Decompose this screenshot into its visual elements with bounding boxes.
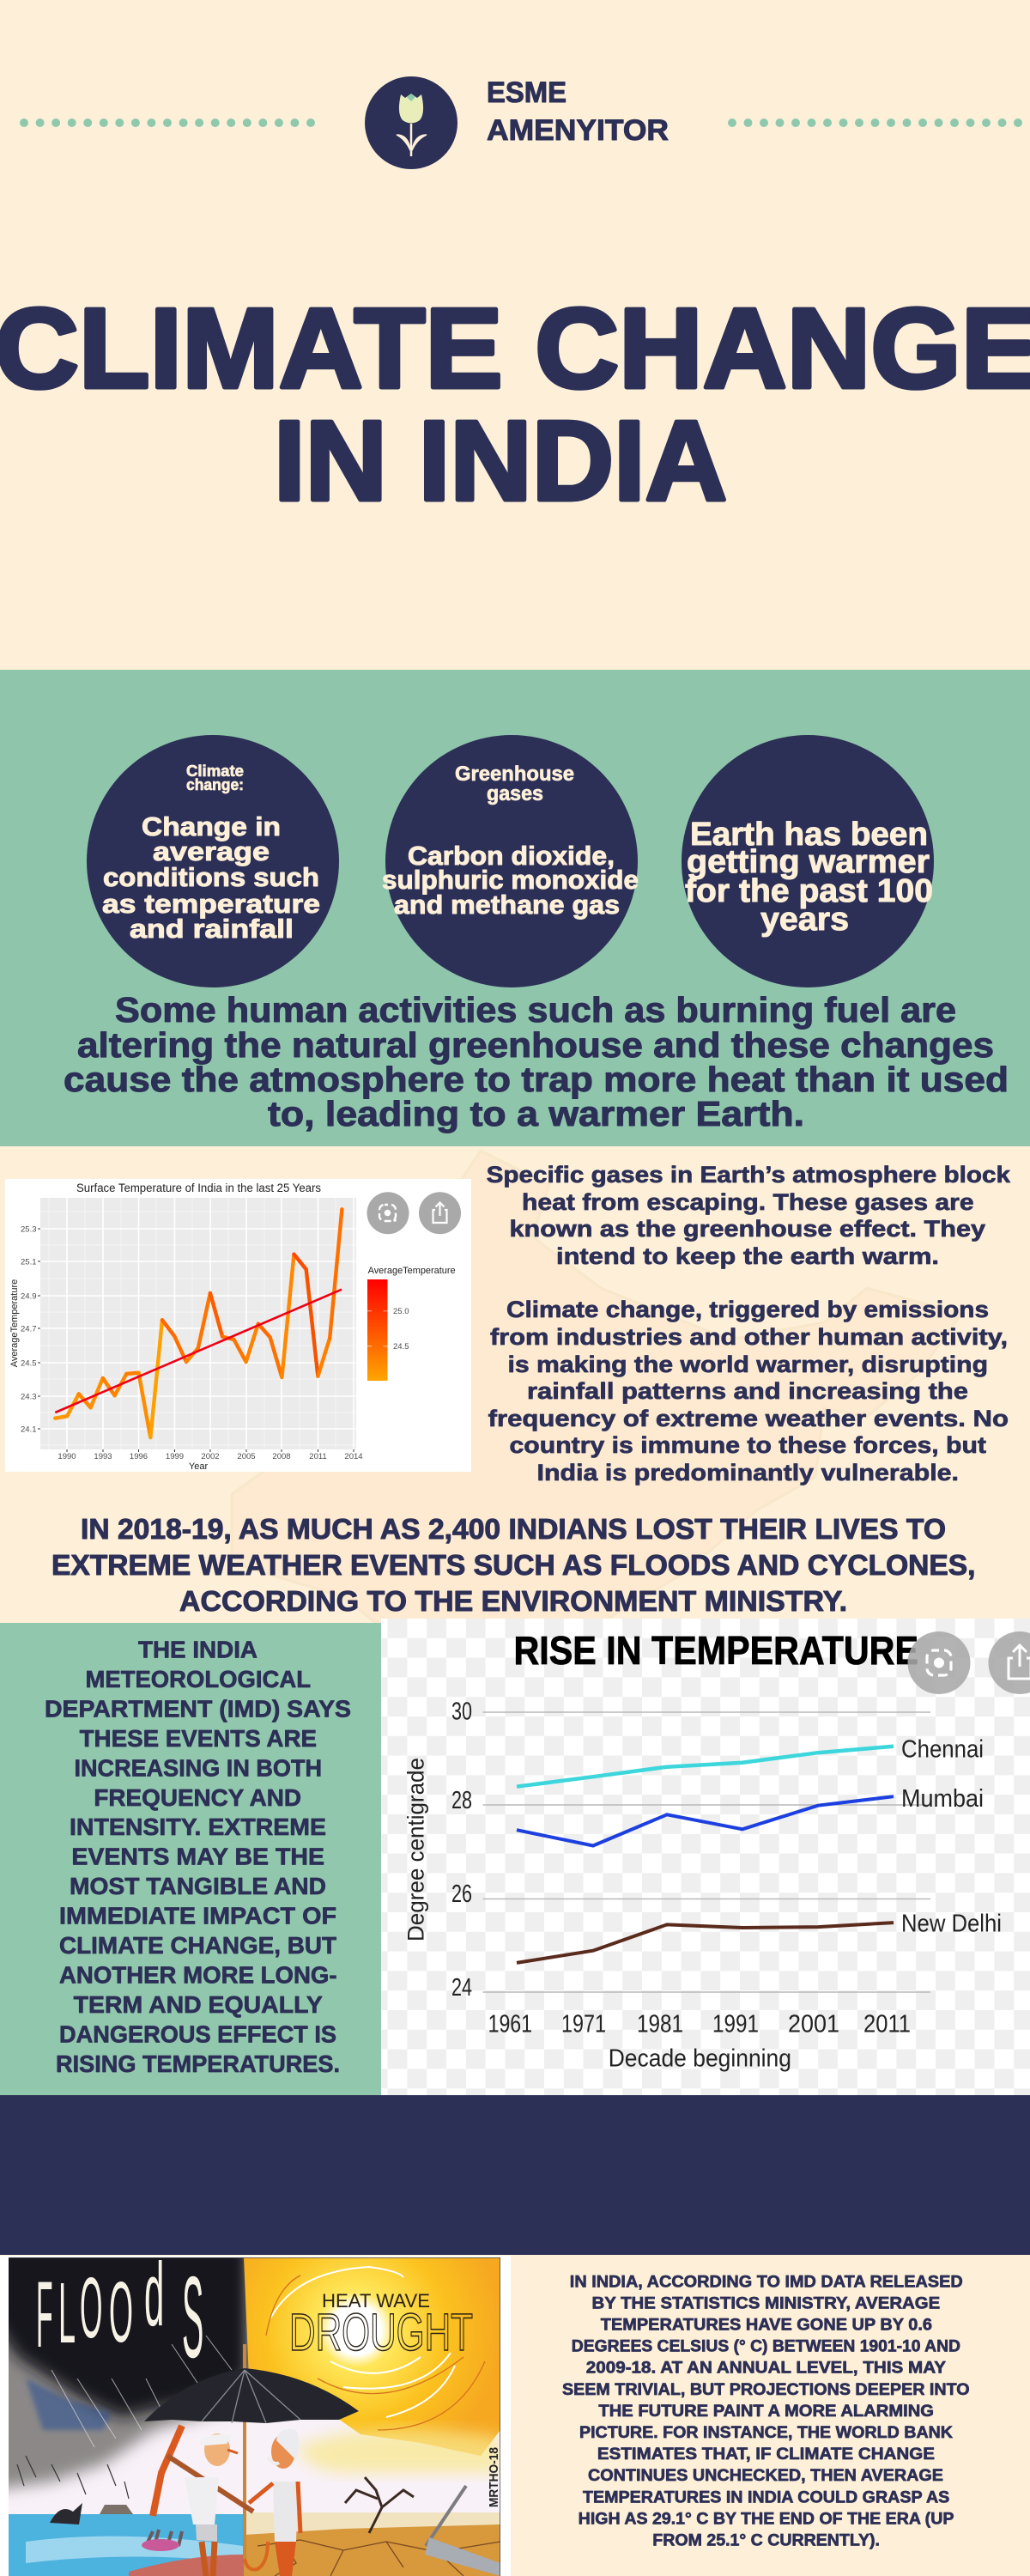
- dotted rule: left: [20, 118, 315, 127]
- heading: extreme weather deaths: IN 2018-19, AS MUCH AS 2,400 INDIANS LOST THEIR LIVES TO: [81, 1513, 946, 1545]
- text: human activities paragraph: cause the atmosphere to trap more heat than it used: [64, 1060, 1009, 1099]
- circle: greenhouse gases: [382, 735, 639, 987]
- circle: greenhouse gases: and methane gas: [394, 890, 620, 920]
- text: greenhouse effect explanation: [487, 1162, 1011, 1485]
- x axis labels: [58, 1449, 363, 1461]
- text: IMD temperature data: PICTURE. FOR INSTANCE, THE WORLD BANK: [579, 2424, 953, 2442]
- text: IMD statement: TERM AND EQUALLY: [74, 1991, 323, 2018]
- line: Chennai: [517, 1747, 894, 1787]
- x axis labels: 1996: [130, 1452, 148, 1461]
- circle: climate change definition: as temperature: [102, 889, 320, 919]
- legend: average temperature colour bar: AverageTemperature: [368, 1266, 456, 1276]
- circle: earth warming: [682, 735, 934, 987]
- text: IMD statement: ANOTHER MORE LONG-: [59, 1961, 337, 1989]
- dotted rule: right: [728, 118, 1022, 127]
- text: IMD statement: METEOROLOGICAL: [86, 1666, 311, 1692]
- text: IMD temperature data: [562, 2273, 970, 2550]
- heading: extreme weather deaths: ACCORDING TO THE ENVIRONMENT MINISTRY.: [179, 1585, 847, 1617]
- cartoon lettering: floods: L: [58, 2265, 76, 2360]
- circle: climate change definition: change:: [186, 776, 244, 793]
- header: author logo and dotted rules: [20, 76, 1022, 169]
- series labels: Chennai: [901, 1736, 984, 1764]
- text: IMD temperature data: ESTIMATES THAT, IF CLIMATE CHANGE: [597, 2445, 935, 2464]
- text: IMD statement: DEPARTMENT (IMD) SAYS: [45, 1695, 351, 1722]
- text: IMD statement: EVENTS MAY BE THE: [71, 1844, 324, 1870]
- title: CLIMATE CHANGE: [0, 285, 1030, 411]
- text: IMD temperature data: CONTINUES UNCHECKED, THEN AVERAGE: [588, 2467, 943, 2485]
- text: IMD temperature data: FROM 25.1° C CURRENTLY).: [652, 2531, 880, 2550]
- flood sky: [0, 2241, 249, 2490]
- cartoon lettering: heat wave: HEAT WAVE: [322, 2290, 430, 2312]
- farmer right: [249, 2429, 300, 2576]
- text: greenhouse effect explanation: Climate change, triggered by emissions: [506, 1297, 989, 1322]
- y axis title: Degree centigrade: [403, 1758, 429, 1941]
- circle: greenhouse gases: Carbon dioxide,: [408, 841, 615, 871]
- icon: share button: [989, 1631, 1030, 1694]
- text: IMD statement: INTENSITY. EXTREME: [70, 1814, 326, 1840]
- axis titles: AverageTemperature: [9, 1279, 20, 1367]
- line: Mumbai: [517, 1796, 894, 1846]
- y axis labels: 25.3: [21, 1224, 36, 1235]
- series labels: [901, 1736, 1002, 1938]
- text: IMD temperature data: DEGREES CELSIUS (° C) BETWEEN 1901-10 AND: [572, 2338, 960, 2356]
- y axis labels: 25.1: [21, 1257, 36, 1267]
- panel: cartoon background: [0, 2256, 511, 2576]
- chart title: Surface Temperature of India in the last 25 Years: [76, 1182, 321, 1194]
- x axis labels: 1981: [637, 2011, 683, 2038]
- y axis labels: 24.5: [21, 1358, 36, 1369]
- icon: lens button: [367, 1192, 409, 1234]
- series labels: Mumbai: [901, 1785, 984, 1813]
- circle: greenhouse gases: Greenhouse: [455, 762, 574, 786]
- circle: earth warming: Earth has been: [690, 817, 928, 853]
- y axis labels: 30: [451, 1698, 472, 1726]
- x axis labels: 2002: [201, 1452, 220, 1461]
- trend line: [55, 1290, 342, 1413]
- circle: climate change definition: Climate: [186, 762, 244, 780]
- band: navy divider: [0, 2095, 1030, 2255]
- chart title: RISE IN TEMPERATURE: [513, 1628, 918, 1673]
- circle: climate change definition: and rainfall: [130, 914, 294, 944]
- series labels: New Delhi: [901, 1911, 1002, 1938]
- text: human activities paragraph: to, leading to a warmer Earth.: [268, 1094, 804, 1133]
- icon: lens button: [908, 1631, 970, 1694]
- cartoon lettering: floods: O: [80, 2259, 102, 2355]
- cartoon lettering: drought: DROUGHT: [289, 2303, 473, 2361]
- text: greenhouse effect explanation: known as the greenhouse effect. They: [510, 1216, 985, 1242]
- y axis labels: 24.7: [21, 1324, 36, 1334]
- text: IMD statement: CLIMATE CHANGE, BUT: [59, 1932, 336, 1959]
- x axis labels: 2008: [272, 1452, 291, 1461]
- text: IMD statement: IMMEDIATE IMPACT OF: [59, 1903, 336, 1929]
- cartoon signature: MRTHO-18: [487, 2447, 501, 2507]
- circle: climate change definition: conditions such: [103, 862, 319, 892]
- heading: extreme weather deaths: [52, 1513, 975, 1617]
- x axis labels: [488, 2011, 911, 2038]
- text: IMD statement: INCREASING IN BOTH: [74, 1754, 322, 1781]
- text: greenhouse effect explanation: heat from escaping. These gases are: [522, 1189, 974, 1215]
- x axis title: Decade beginning: [609, 2045, 791, 2073]
- text: greenhouse effect explanation: is making the world warmer, disrupting: [508, 1352, 988, 1377]
- text: human activities paragraph: [64, 990, 1009, 1133]
- cartoon lettering: floods: O: [109, 2264, 133, 2360]
- panel: IMD statement: [0, 1623, 381, 2095]
- text: IMD temperature data: TEMPERATURES HAVE GONE UP BY 0.6: [601, 2317, 932, 2334]
- x axis labels: 1999: [166, 1452, 184, 1461]
- chart: surface temperature of India: [5, 1179, 471, 1472]
- line: New Delhi: [517, 1923, 894, 1963]
- axis titles: [9, 1279, 208, 1472]
- y axis labels: 24: [451, 1974, 472, 2002]
- text: greenhouse effect explanation: intend to keep the earth warm.: [556, 1243, 939, 1269]
- text: greenhouse effect explanation: India is predominantly vulnerable.: [537, 1460, 959, 1485]
- text: greenhouse effect explanation: frequency of extreme weather events. No: [488, 1406, 1009, 1431]
- x axis labels: 1990: [58, 1452, 76, 1461]
- text: IMD temperature data: SEEM TRIVIAL, BUT PROJECTIONS DEEPER INTO: [562, 2381, 970, 2399]
- author name: AMENYITOR: [487, 114, 669, 147]
- circle: earth warming: years: [760, 902, 849, 938]
- cartoon lettering: floods: F: [36, 2263, 53, 2367]
- flood ground and water: [9, 2456, 244, 2576]
- text: IMD temperature data: BY THE STATISTICS MINISTRY, AVERAGE: [592, 2294, 940, 2312]
- cartoon lettering: floods: d: [144, 2244, 164, 2344]
- y axis labels: 24.1: [21, 1425, 36, 1434]
- y axis labels: 28: [451, 1787, 472, 1814]
- x axis labels: 1991: [712, 2011, 759, 2038]
- icon: share button: [419, 1192, 461, 1234]
- cartoon lettering: floods: S: [182, 2253, 203, 2383]
- x axis labels: 1961: [488, 2011, 532, 2038]
- x axis labels: 2011: [309, 1452, 327, 1461]
- chart: rise in temperature: [381, 1619, 1030, 2095]
- background: faint map of India: [232, 1151, 961, 1812]
- x axis labels: 2014: [344, 1452, 363, 1461]
- text: IMD temperature data: THE FUTURE PAINT A MORE ALARMING: [598, 2403, 934, 2421]
- cartoon frame: [9, 2257, 500, 2576]
- text: IMD statement: THESE EVENTS ARE: [80, 1725, 317, 1752]
- umbrella: [144, 2344, 359, 2569]
- y axis labels: 24.3: [21, 1393, 36, 1401]
- author name: ESME: [487, 76, 566, 109]
- drought ground: [244, 2477, 500, 2576]
- panel: definitions band: [0, 670, 1030, 1146]
- x axis labels: 2001: [788, 2011, 839, 2038]
- text: IMD statement: RISING TEMPERATURES.: [56, 2050, 340, 2077]
- text: greenhouse effect explanation: rainfall patterns and increasing the: [527, 1378, 968, 1404]
- circle: greenhouse gases: gases: [487, 782, 543, 805]
- author name: [487, 76, 669, 147]
- circle: greenhouse gases: sulphuric monoxide: [382, 865, 639, 895]
- text: IMD statement: FREQUENCY AND: [94, 1784, 301, 1811]
- title: [0, 285, 1030, 524]
- y axis labels: [451, 1698, 472, 2002]
- text: greenhouse effect explanation: Specific gases in Earth’s atmosphere block: [487, 1162, 1011, 1188]
- text: human activities paragraph: altering the natural greenhouse and these changes: [77, 1025, 994, 1065]
- text: IMD temperature data: HIGH AS 29.1° C BY THE END OF THE ERA (UP: [579, 2510, 954, 2528]
- legend: average temperature colour bar: 25.0: [393, 1307, 409, 1316]
- legend: average temperature colour bar: [367, 1266, 456, 1381]
- cartoon lettering: floods: [38, 2260, 203, 2358]
- heading: extreme weather deaths: EXTREME WEATHER EVENTS SUCH AS FLOODS AND CYCLONES,: [52, 1549, 975, 1581]
- text: IMD temperature data: 2009-18. AT AN ANNUAL LEVEL, THIS MAY: [586, 2360, 946, 2378]
- y axis labels: 24.9: [21, 1291, 36, 1302]
- text: greenhouse effect explanation: from industries and other human activity,: [490, 1324, 1008, 1350]
- text: IMD statement: THE INDIA: [138, 1637, 258, 1662]
- y axis labels: [21, 1224, 40, 1434]
- text: IMD statement: MOST TANGIBLE AND: [70, 1873, 326, 1899]
- axis titles: Year: [189, 1461, 208, 1472]
- x axis labels: 2005: [237, 1452, 256, 1461]
- circle: earth warming: getting warmer: [687, 844, 930, 880]
- circle: climate change definition: [87, 735, 339, 987]
- y axis labels: 26: [451, 1880, 472, 1908]
- text: IMD statement: DANGEROUS EFFECT IS: [59, 2020, 336, 2047]
- title: IN INDIA: [274, 398, 727, 524]
- text: greenhouse effect explanation: country is immune to these forces, but: [510, 1432, 986, 1458]
- x axis labels: 2011: [863, 2011, 911, 2038]
- drought sky with sun: [244, 2257, 500, 2473]
- x axis labels: 1971: [561, 2011, 606, 2038]
- text: IMD statement: [45, 1637, 351, 2077]
- text: IMD temperature data: TEMPERATURES IN INDIA COULD GRASP AS: [583, 2488, 949, 2506]
- farmer left: [153, 2426, 253, 2576]
- x axis labels: 1993: [94, 1452, 112, 1461]
- icon: tulip logo: [365, 76, 457, 169]
- circle: earth warming: for the past 100: [685, 873, 933, 909]
- legend: average temperature colour bar: 24.5: [393, 1342, 409, 1352]
- text: human activities paragraph: Some human activities such as burning fuel are: [115, 990, 956, 1030]
- temperature line series: [55, 1209, 342, 1437]
- illustration: floods and drought cartoon: [0, 2241, 501, 2576]
- circle: climate change definition: average: [153, 836, 270, 866]
- text: IMD temperature data: IN INDIA, ACCORDING TO IMD DATA RELEASED: [570, 2273, 963, 2291]
- circle: climate change definition: Change in: [142, 811, 281, 841]
